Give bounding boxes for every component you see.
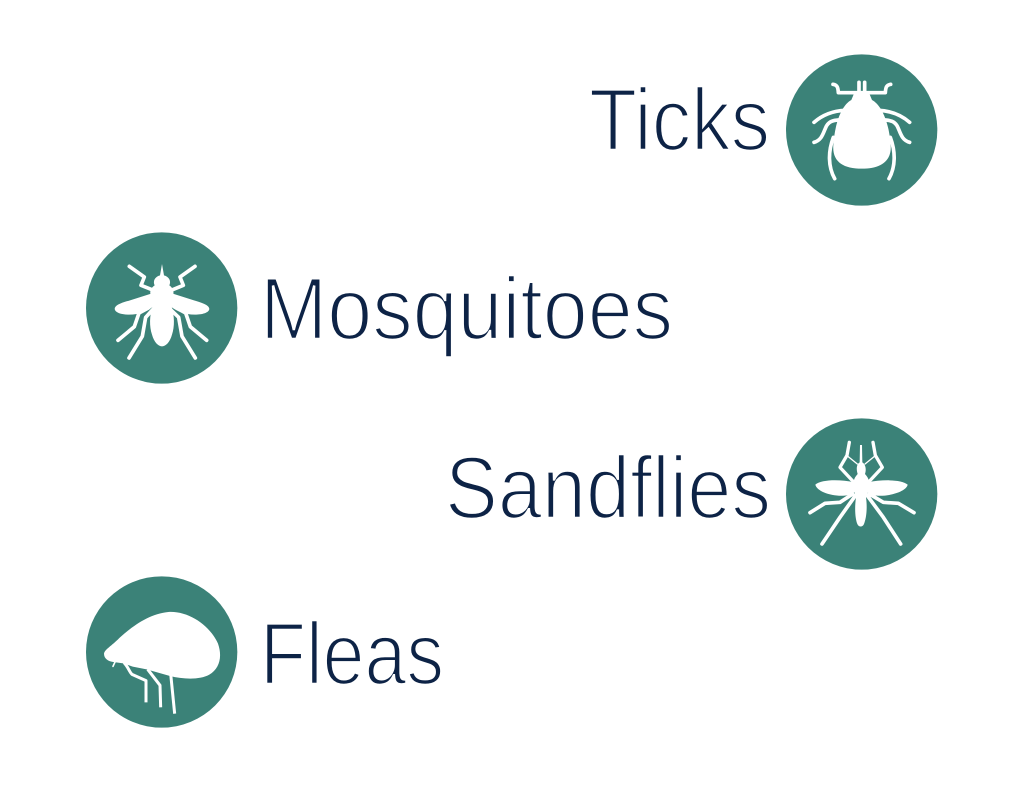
label: Ticks: Ticks <box>589 70 770 169</box>
icon: mosquito <box>86 232 237 384</box>
icon: tick <box>786 54 937 206</box>
label: Sandflies: Sandflies <box>445 438 771 537</box>
icon: sandfly <box>786 418 937 570</box>
label: Fleas: Fleas <box>260 604 444 703</box>
label: Mosquitoes: Mosquitoes <box>260 259 673 358</box>
icon: flea <box>86 576 237 728</box>
